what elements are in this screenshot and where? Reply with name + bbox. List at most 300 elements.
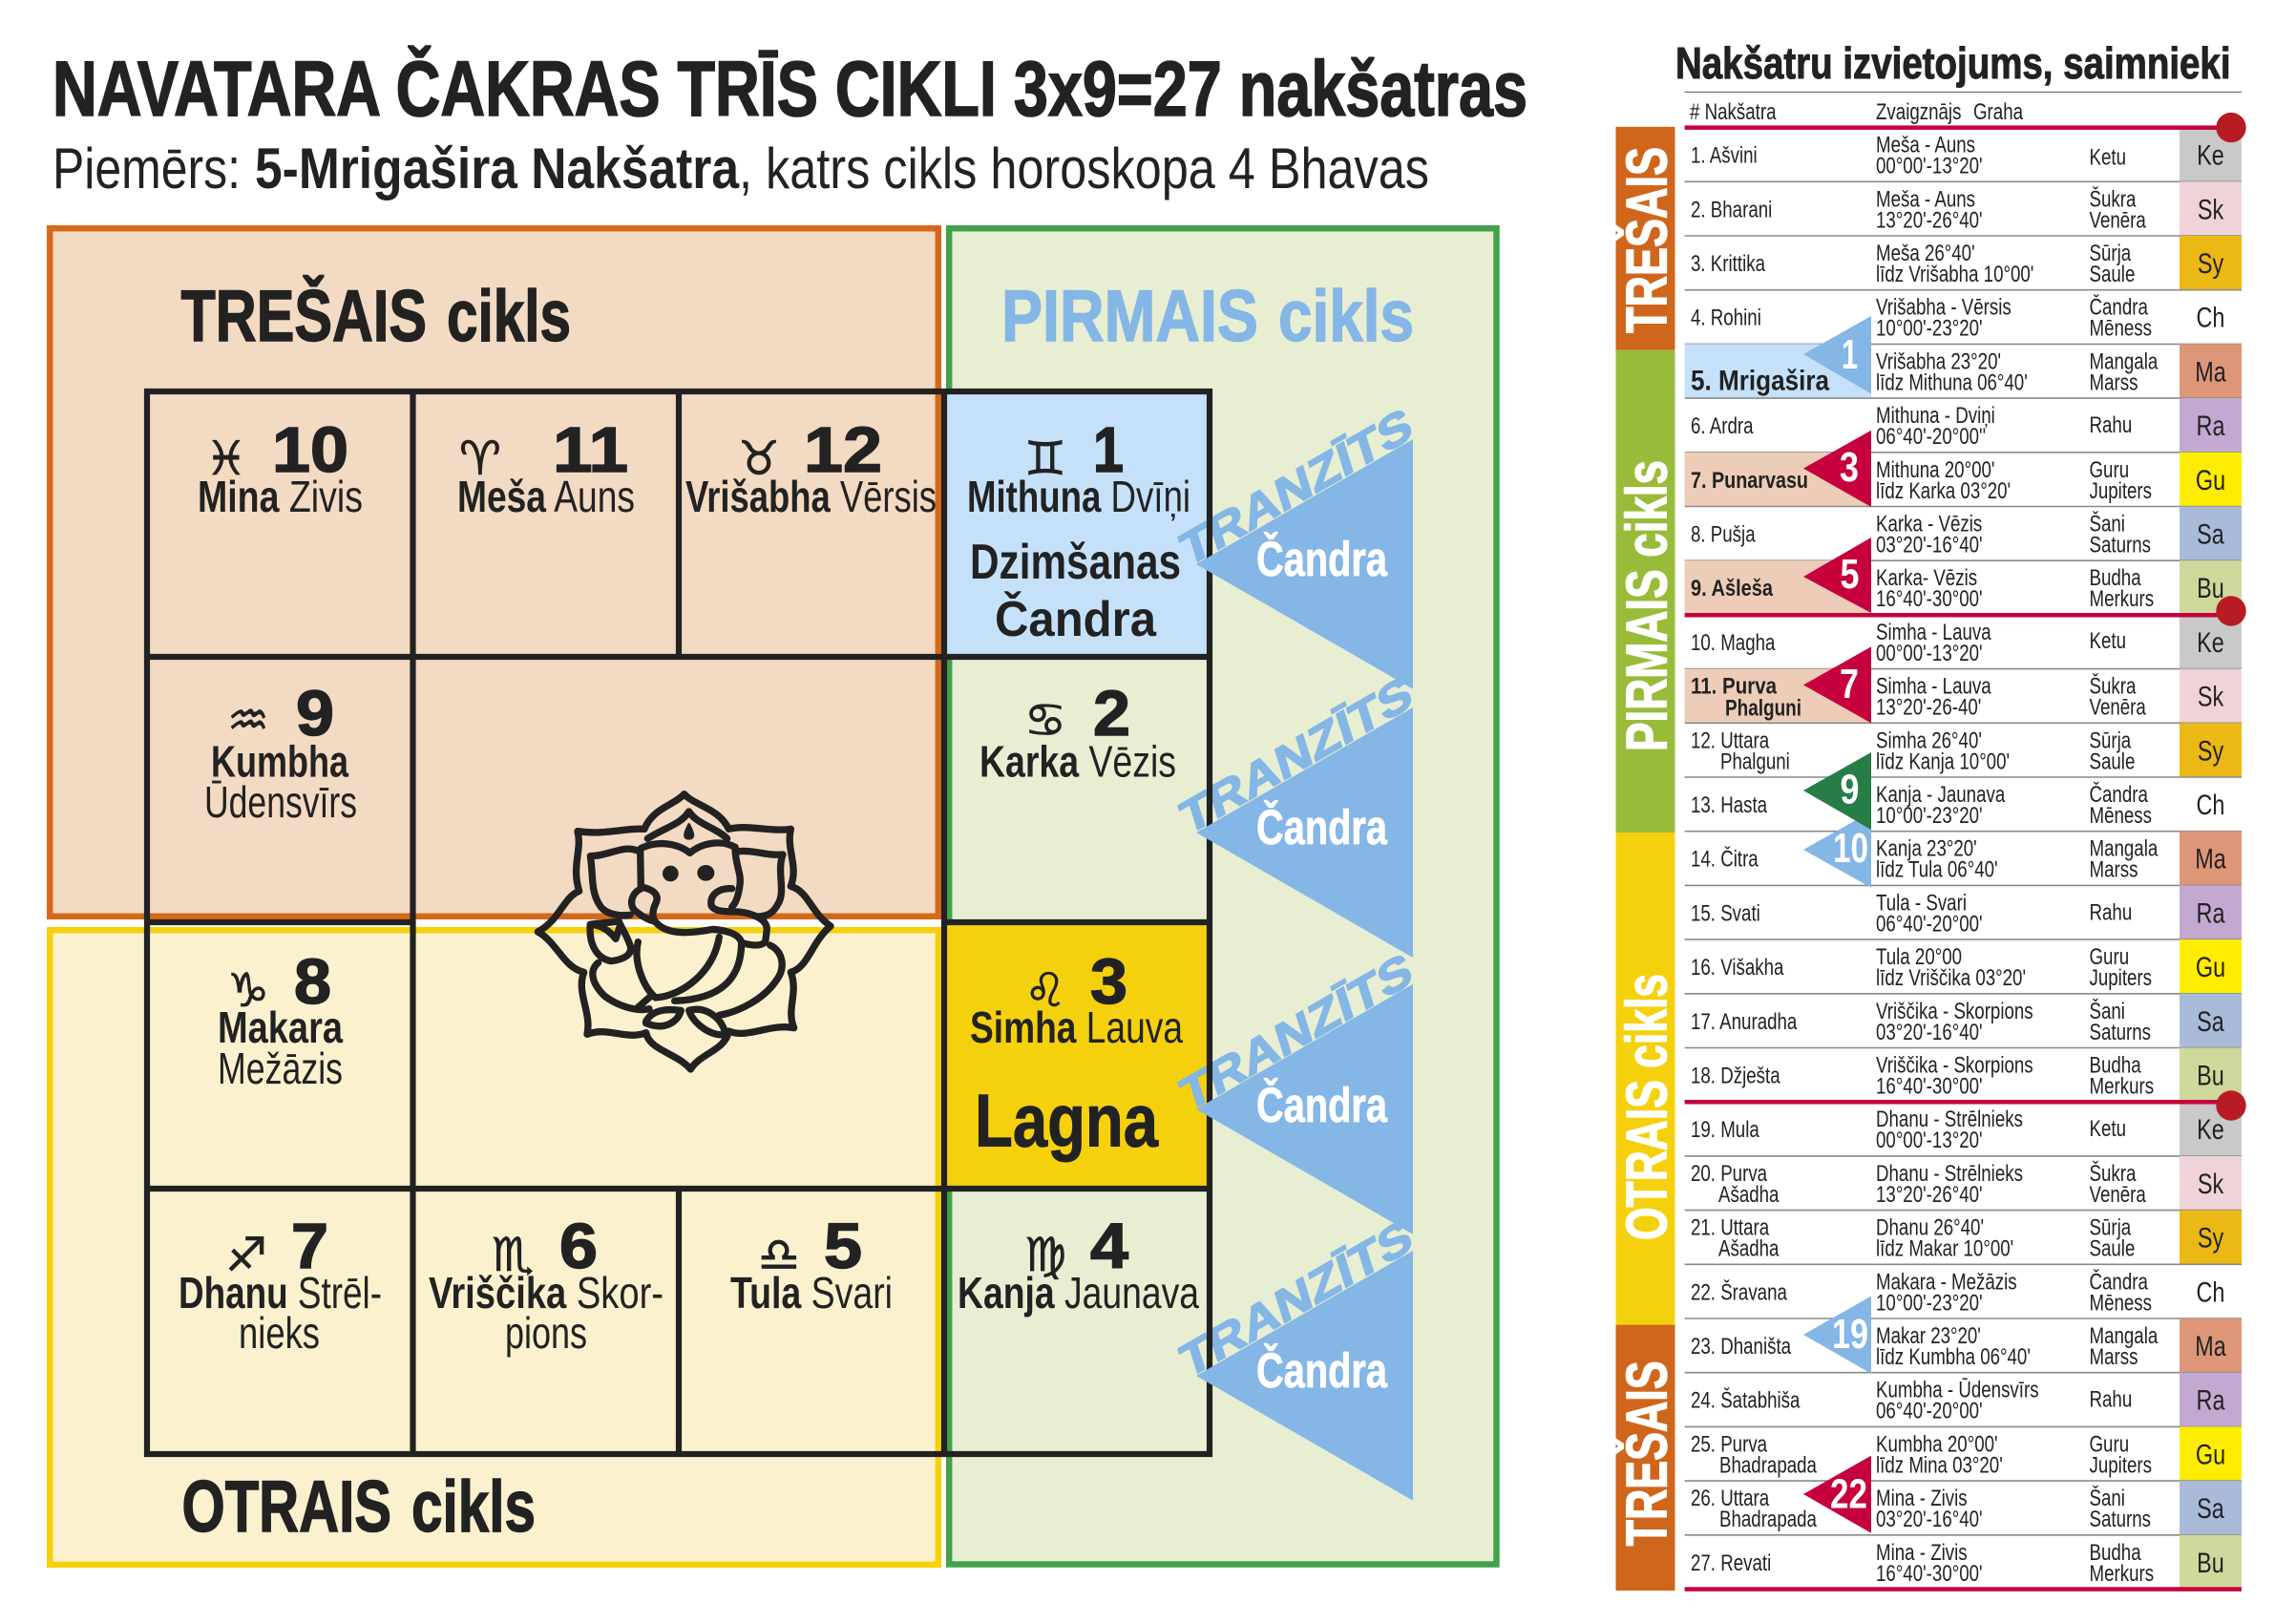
cycle divider 2	[1685, 596, 2246, 626]
row 2: Šukra	[2090, 185, 2136, 212]
row 11: Šukra	[2090, 672, 2136, 699]
row 26: Sa	[2197, 1492, 2224, 1525]
house 3: Lagna	[975, 1079, 1159, 1163]
row 4: Vrišabha - Vērsis	[1876, 295, 2012, 320]
house 11: ♈︎	[459, 432, 501, 486]
house 1: 1	[1093, 414, 1124, 486]
house 5: Tula Svari	[730, 1268, 893, 1318]
row 17: Šani	[2090, 997, 2125, 1023]
row 27	[1691, 1535, 2242, 1589]
row 2: 13°20'-26°40'	[1876, 207, 1983, 233]
row 4	[1685, 293, 2242, 344]
arrow marker 5	[1803, 538, 1871, 613]
arrow marker 22	[1803, 1456, 1871, 1533]
row 16: 16. Višakha	[1691, 955, 1783, 981]
sidebar: third cycle top: TREŠAIS	[1615, 147, 1679, 333]
row 3: līdz Vrišabha 10°00'	[1876, 262, 2033, 287]
arrow marker 7: 7	[1840, 661, 1859, 707]
cycle divider 3	[1685, 1090, 2246, 1121]
row 3: Sy	[2198, 247, 2224, 280]
house 8: Makara	[218, 1002, 343, 1052]
house 4: 4	[1090, 1211, 1128, 1282]
row 23: 23. Dhaništa	[1691, 1334, 1791, 1360]
row 12: Sy	[2198, 735, 2224, 767]
row 22: 10°00'-23°20'	[1876, 1290, 1983, 1316]
subtitle: , katrs cikls horoskopa 4 Bhavas	[739, 137, 1429, 200]
row 21: Sy	[2198, 1222, 2224, 1254]
row 7: līdz Karka 03°20'	[1876, 478, 2011, 503]
arrow marker 19	[1803, 1297, 1871, 1374]
row 11: 11. Purva	[1691, 674, 1778, 700]
house 11: Meša Auns	[457, 472, 635, 521]
highlighted house cell: ascendant	[944, 922, 1210, 1189]
transit labels: TRANZĪTS	[1175, 666, 1418, 846]
arrow marker 9: 9	[1841, 767, 1860, 813]
row 3	[1685, 236, 2242, 290]
row 25: Bhadrapada	[1719, 1452, 1817, 1478]
row 15: 15. Svati	[1691, 900, 1760, 926]
row 20: Ašadha	[1718, 1182, 1779, 1207]
row 27: Mina - Zivis	[1876, 1540, 1968, 1565]
row 8: Šani	[2090, 510, 2125, 537]
row 7	[1685, 453, 2242, 506]
row 26	[1685, 1481, 2242, 1535]
row 14: Mangala	[2090, 836, 2158, 861]
row 15: 06°40'-20°00'	[1876, 911, 1983, 937]
house 2	[979, 678, 1176, 787]
row 8: 8. Pušja	[1691, 521, 1756, 547]
row 5: Ma	[2195, 356, 2226, 388]
row 14	[1685, 832, 2242, 885]
row 6: 6. Ardra	[1691, 413, 1754, 439]
row 12	[1685, 723, 2242, 777]
row 11	[1685, 669, 2242, 723]
house 6: ♏︎	[492, 1228, 534, 1282]
arrow marker 10: 10	[1833, 825, 1868, 872]
row 14: Kanja 23°20'	[1876, 836, 1977, 861]
transit triangle 3	[1196, 984, 1413, 1234]
house 3: 3	[1090, 946, 1127, 1018]
transit triangle 4	[1196, 1251, 1413, 1501]
house 7	[179, 1211, 382, 1358]
row 12: 12. Uttara	[1691, 728, 1769, 753]
row 15: Tula - Svari	[1876, 890, 1967, 916]
row 5: 5. Mrigašira	[1691, 365, 1829, 396]
row 18: Budha	[2090, 1052, 2141, 1078]
row 14: Marss	[2090, 857, 2138, 882]
row 21: Sūrja	[2090, 1214, 2131, 1240]
arrow marker 3	[1803, 431, 1871, 507]
row 5: līdz Mithuna 06°40'	[1876, 369, 2028, 395]
house 2: Karka Vēzis	[979, 737, 1176, 787]
icon: Ganesha in lotus	[537, 794, 831, 1069]
row 11: 13°20'-26-40'	[1876, 694, 1981, 720]
heading: first cycle: cikls	[1278, 276, 1414, 357]
row 19: 19. Mula	[1691, 1117, 1759, 1143]
row 16: Guru	[2090, 944, 2129, 970]
row 9: 9. Ašleša	[1691, 576, 1774, 601]
transit triangle 2: Čandra	[1256, 799, 1387, 854]
row 3: Saule	[2090, 262, 2135, 287]
house 5: ♎︎	[758, 1228, 800, 1282]
panel: first cycle frame	[949, 228, 1497, 1565]
row 1: Ketu	[2090, 144, 2126, 170]
row 5: Vrišabha 23°20'	[1876, 348, 2001, 374]
row 14: 14. Čitra	[1691, 845, 1759, 872]
house 5: 5	[824, 1211, 862, 1282]
subtitle	[53, 137, 1429, 200]
row 25: līdz Mina 03°20'	[1876, 1452, 2003, 1478]
row 22	[1685, 1268, 2242, 1318]
row 15	[1685, 885, 2242, 939]
house 9: Kumbha	[211, 737, 348, 787]
house 3: Simha Lauva	[970, 1002, 1183, 1052]
row 22: Čandra	[2090, 1268, 2148, 1295]
house 10: ♓︎	[205, 432, 247, 486]
house 4	[958, 1211, 1199, 1318]
row 8: Saturns	[2090, 532, 2151, 558]
row 25: Kumbha 20°00'	[1876, 1431, 1998, 1457]
house 12: Vrišabha Vērsis	[685, 472, 937, 521]
row 7: Jupiters	[2090, 478, 2152, 503]
row 8	[1685, 506, 2242, 560]
row 4: 10°00'-23°20'	[1876, 316, 1983, 341]
row 25: 25. Purva	[1691, 1431, 1767, 1457]
house 9: 9	[296, 678, 334, 749]
house 12	[685, 414, 937, 521]
row 5: Marss	[2090, 369, 2138, 395]
row 10	[1685, 615, 2242, 669]
highlighted house cell: birth moon	[944, 391, 1210, 657]
row 10: 10. Magha	[1691, 630, 1775, 655]
house 7: ♐︎	[225, 1228, 267, 1282]
row 24: Ra	[2197, 1384, 2224, 1416]
house 9: ♒︎	[227, 693, 269, 748]
row 19: 00°00'-13°20'	[1876, 1128, 1983, 1153]
house 9: Ūdensvīrs	[204, 777, 357, 827]
row 9: Merkurs	[2090, 586, 2154, 612]
arrow marker 1: 1	[1842, 331, 1858, 378]
house 4: ♍︎	[1024, 1228, 1066, 1282]
row 22: 22. Šravana	[1691, 1278, 1787, 1305]
row 23: Marss	[2090, 1344, 2138, 1370]
transit triangle 1	[1196, 439, 1413, 689]
house 10	[198, 414, 363, 521]
row 17: Vriščika - Skorpions	[1876, 999, 2033, 1023]
row 1	[1685, 128, 2242, 181]
heading: third cycle: TREŠAIS	[181, 276, 427, 357]
row 26: 26. Uttara	[1691, 1486, 1769, 1511]
row 18: Vriščika - Skorpions	[1876, 1052, 2033, 1078]
row 6: Ra	[2197, 410, 2224, 442]
house 8	[218, 946, 343, 1093]
transit labels	[1175, 398, 1418, 1389]
row 1: 1. Ašvini	[1691, 142, 1758, 168]
arrow marker 5: 5	[1841, 551, 1860, 598]
house 8: ♑︎	[227, 963, 269, 1018]
transit labels: TRANZĪTS	[1175, 1210, 1418, 1389]
row 16	[1685, 939, 2242, 994]
row 17: 17. Anuradha	[1691, 1009, 1797, 1034]
row 15: Rahu	[2090, 899, 2132, 925]
house 12: 12	[804, 414, 882, 486]
row 6: Mithuna - Dviņi	[1876, 403, 1995, 429]
row 5	[1685, 344, 2242, 398]
row 21	[1685, 1211, 2242, 1264]
heading: second cycle: cikls	[411, 1466, 536, 1548]
row 1: Meša - Auns	[1876, 132, 1975, 158]
row 10: Ketu	[2090, 628, 2126, 653]
row 19: Dhanu - Strēlnieks	[1876, 1107, 2023, 1132]
row 6: Rahu	[2090, 412, 2132, 438]
row 20: Sk	[2198, 1168, 2224, 1200]
house 3	[970, 946, 1183, 1163]
row 26: Saturns	[2090, 1507, 2151, 1532]
row 3: Sūrja	[2090, 241, 2131, 266]
arrow marker 9	[1803, 752, 1871, 830]
house 7: 7	[291, 1211, 328, 1282]
table column headers: # Nakšatra	[1690, 99, 1777, 124]
row 19: Ke	[2197, 1113, 2224, 1146]
house 1: Čandra	[995, 591, 1157, 647]
house 12: ♉︎	[738, 432, 780, 486]
row 21: 21. Uttara	[1691, 1214, 1769, 1240]
row 25	[1685, 1426, 2242, 1481]
row 6	[1685, 398, 2242, 453]
house 10: 10	[272, 414, 348, 486]
row 21: Ašadha	[1718, 1235, 1779, 1261]
row 26: Mina - Zivis	[1876, 1486, 1968, 1511]
house 6: pions	[505, 1308, 587, 1358]
row 5: Mangala	[2090, 348, 2158, 374]
row 14: līdz Tula 06°40'	[1876, 857, 1998, 882]
row 18: Merkurs	[2090, 1073, 2154, 1099]
row 13: 10°00'-23°20'	[1876, 803, 1983, 829]
transit labels: TRANZĪTS	[1175, 943, 1418, 1123]
row 27: Bu	[2197, 1547, 2224, 1578]
transit triangle 1: Čandra	[1256, 531, 1387, 586]
row 12: līdz Kanja 10°00'	[1876, 749, 2010, 774]
row 17: Saturns	[2090, 1020, 2151, 1044]
row 10: 00°00'-13°20'	[1876, 641, 1983, 665]
subtitle: 5-Mrigašira Nakšatra	[255, 137, 740, 200]
row 19	[1685, 1102, 2242, 1156]
row 9: Karka- Vēzis	[1876, 565, 1977, 591]
row 24: 24. Šatabhiša	[1691, 1386, 1800, 1413]
row 19: Ketu	[2090, 1116, 2126, 1142]
sidebar: second cycle: OTRAIS cikls	[1615, 974, 1679, 1240]
row 13	[1685, 781, 2242, 832]
house 2: ♋︎	[1024, 693, 1066, 748]
row 16: Tula 20°00	[1876, 944, 1962, 970]
row 12: Saule	[2090, 749, 2135, 774]
row 23	[1685, 1318, 2242, 1373]
house 7: Dhanu Strēl-	[179, 1268, 382, 1318]
row 11: Simha - Lauva	[1876, 673, 1991, 699]
house 5	[730, 1211, 893, 1318]
arrow marker 7	[1803, 646, 1871, 723]
row 2: Venēra	[2090, 207, 2146, 233]
row 17: Sa	[2197, 1005, 2224, 1037]
row 13: Mēness	[2090, 803, 2152, 829]
sidebar: first cycle: PIRMAIS cikls	[1615, 460, 1679, 751]
heading: third cycle: cikls	[447, 276, 571, 357]
row 10: Ke	[2197, 626, 2224, 659]
arrow marker 1	[1803, 316, 1871, 393]
row 15: Ra	[2197, 897, 2224, 929]
subtitle: Piemērs:	[53, 137, 241, 200]
row 2	[1685, 181, 2242, 236]
row 2: Meša - Auns	[1876, 186, 1975, 212]
row 8: Sa	[2197, 518, 2224, 550]
row 11: Sk	[2198, 681, 2224, 712]
row 12: Phalguni	[1720, 749, 1790, 774]
house 3: ♌︎	[1024, 963, 1066, 1018]
row 27: 27. Revati	[1691, 1550, 1771, 1575]
row 27: Merkurs	[2090, 1561, 2154, 1586]
row 6: 06°40'-20°00''	[1876, 424, 1986, 450]
transit triangle 2	[1196, 707, 1413, 958]
table bottom rule	[1685, 1587, 2242, 1592]
house 4: Kanja Jaunava	[958, 1268, 1199, 1318]
row 7: Mithuna 20°00'	[1876, 457, 1994, 482]
row 23: Makar 23°20'	[1876, 1323, 1981, 1349]
row 9: Budha	[2090, 565, 2141, 591]
row 17	[1685, 994, 2242, 1048]
row 4: 4. Rohini	[1691, 306, 1761, 330]
row 17: 03°20'-16°40'	[1876, 1020, 1983, 1044]
cycle divider 1	[1685, 113, 2246, 142]
row 24	[1685, 1373, 2242, 1426]
heading: second cycle: OTRAIS	[181, 1466, 391, 1548]
panel: third cycle background	[50, 228, 938, 917]
row 14: Ma	[2195, 843, 2226, 875]
row 26: 03°20'-16°40'	[1876, 1507, 1983, 1532]
house 6: Vriščika Skor-	[429, 1268, 664, 1318]
row 20: Venēra	[2090, 1182, 2146, 1207]
row 12: Sūrja	[2090, 728, 2131, 753]
row 24: Kumbha - Ūdensvīrs	[1876, 1376, 2039, 1403]
row 1: Ke	[2197, 139, 2224, 171]
row 26: Bhadrapada	[1719, 1507, 1817, 1532]
row 24: 06°40'-20°00'	[1876, 1399, 1983, 1424]
row 7: 7. Punarvasu	[1691, 468, 1808, 494]
house 10: Mina Zivis	[198, 472, 363, 521]
row 27: Budha	[2090, 1540, 2141, 1565]
house 9	[204, 678, 357, 827]
table column headers	[1685, 92, 2242, 124]
row 25: Gu	[2196, 1439, 2225, 1470]
sidebar: third cycle bottom: TREŠAIS	[1615, 1360, 1679, 1546]
row 8: Karka - Vēzis	[1876, 511, 1982, 537]
row 27: 16°40'-30°00'	[1876, 1561, 1983, 1586]
row 16: Jupiters	[2090, 965, 2152, 991]
row 25: Jupiters	[2090, 1452, 2152, 1478]
arrow marker 22: 22	[1830, 1470, 1867, 1517]
table column headers: Zvaigznājs	[1876, 99, 1961, 124]
row 1: 00°00'-13°20'	[1876, 153, 1983, 179]
row 3: 3. Krittika	[1691, 251, 1765, 277]
row 9	[1685, 560, 2242, 615]
house grid	[144, 389, 1212, 1457]
house 2: 2	[1093, 678, 1130, 749]
row 13: 13. Hasta	[1691, 792, 1767, 818]
house 8: Mežāzis	[218, 1044, 343, 1093]
row 13: Kanja - Jaunava	[1876, 782, 2005, 808]
row 20: 13°20'-26°40'	[1876, 1182, 1983, 1207]
row 21: līdz Makar 10°00'	[1876, 1235, 2013, 1261]
transit labels: TRANZĪTS	[1175, 398, 1418, 578]
house 6: 6	[559, 1211, 598, 1282]
row 11: Phalguni	[1725, 696, 1801, 722]
row 18: 18. Džješta	[1691, 1063, 1780, 1088]
arrow marker 10	[1803, 812, 1871, 888]
house 8: 8	[294, 946, 331, 1018]
row 4: Ch	[2197, 302, 2224, 333]
row 16: Gu	[2196, 951, 2225, 983]
arrow marker 3: 3	[1840, 444, 1859, 491]
row 23: Mangala	[2090, 1323, 2158, 1349]
row 23: līdz Kumbha 06°40'	[1876, 1344, 2031, 1370]
row 16: līdz Vriščika 03°20'	[1876, 965, 2026, 991]
row 23: Ma	[2195, 1330, 2226, 1362]
row 12: Simha 26°40'	[1876, 728, 1982, 753]
row 3: Meša 26°40'	[1876, 241, 1975, 266]
row 20: Dhanu - Strēlnieks	[1876, 1161, 2023, 1186]
panel: second cycle background	[50, 930, 938, 1565]
house 1: Dzimšanas	[970, 535, 1181, 590]
row 9: Bu	[2197, 572, 2224, 604]
arrow marker 19: 19	[1832, 1311, 1868, 1358]
house 6	[429, 1211, 664, 1358]
row 10: Simha - Lauva	[1876, 620, 1991, 644]
row 18: 16°40'-30°00'	[1876, 1073, 1983, 1099]
row 21: Dhanu 26°40'	[1876, 1214, 1984, 1240]
row 4: Čandra	[2090, 293, 2148, 320]
row 7: Guru	[2090, 457, 2129, 482]
row 13: Ch	[2197, 789, 2224, 821]
row 20: Šukra	[2090, 1160, 2136, 1186]
row 4: Mēness	[2090, 316, 2152, 341]
row 18: Bu	[2197, 1060, 2224, 1091]
house 7: nieks	[239, 1308, 320, 1358]
house 1: Mithuna Dvīņi	[967, 472, 1190, 521]
row 20	[1685, 1156, 2242, 1211]
house 11	[457, 414, 635, 521]
heading: first cycle: PIRMAIS	[1001, 276, 1258, 357]
row 24: Rahu	[2090, 1387, 2132, 1412]
row 8: 03°20'-16°40'	[1876, 532, 1983, 558]
house 1: ♊︎	[1024, 432, 1066, 486]
row 7: Gu	[2196, 464, 2225, 496]
row 20: 20. Purva	[1691, 1161, 1767, 1186]
row 9: 16°40'-30°00'	[1876, 586, 1983, 612]
row 2: Sk	[2198, 194, 2224, 225]
row 26: Šani	[2090, 1485, 2125, 1511]
row 22: Makara - Mežāzis	[1876, 1269, 2017, 1295]
table column headers: Graha	[1973, 99, 2023, 124]
house 11: 11	[553, 414, 628, 486]
house 1	[967, 414, 1190, 647]
row 11: Venēra	[2090, 694, 2146, 720]
row 22: Ch	[2197, 1276, 2224, 1308]
row 25: Guru	[2090, 1431, 2129, 1457]
transit triangle 4: Čandra	[1256, 1342, 1387, 1398]
row 2: 2. Bharani	[1691, 197, 1772, 222]
row 13: Čandra	[2090, 781, 2148, 808]
row 22: Mēness	[2090, 1290, 2152, 1316]
row 21: Saule	[2090, 1235, 2135, 1261]
